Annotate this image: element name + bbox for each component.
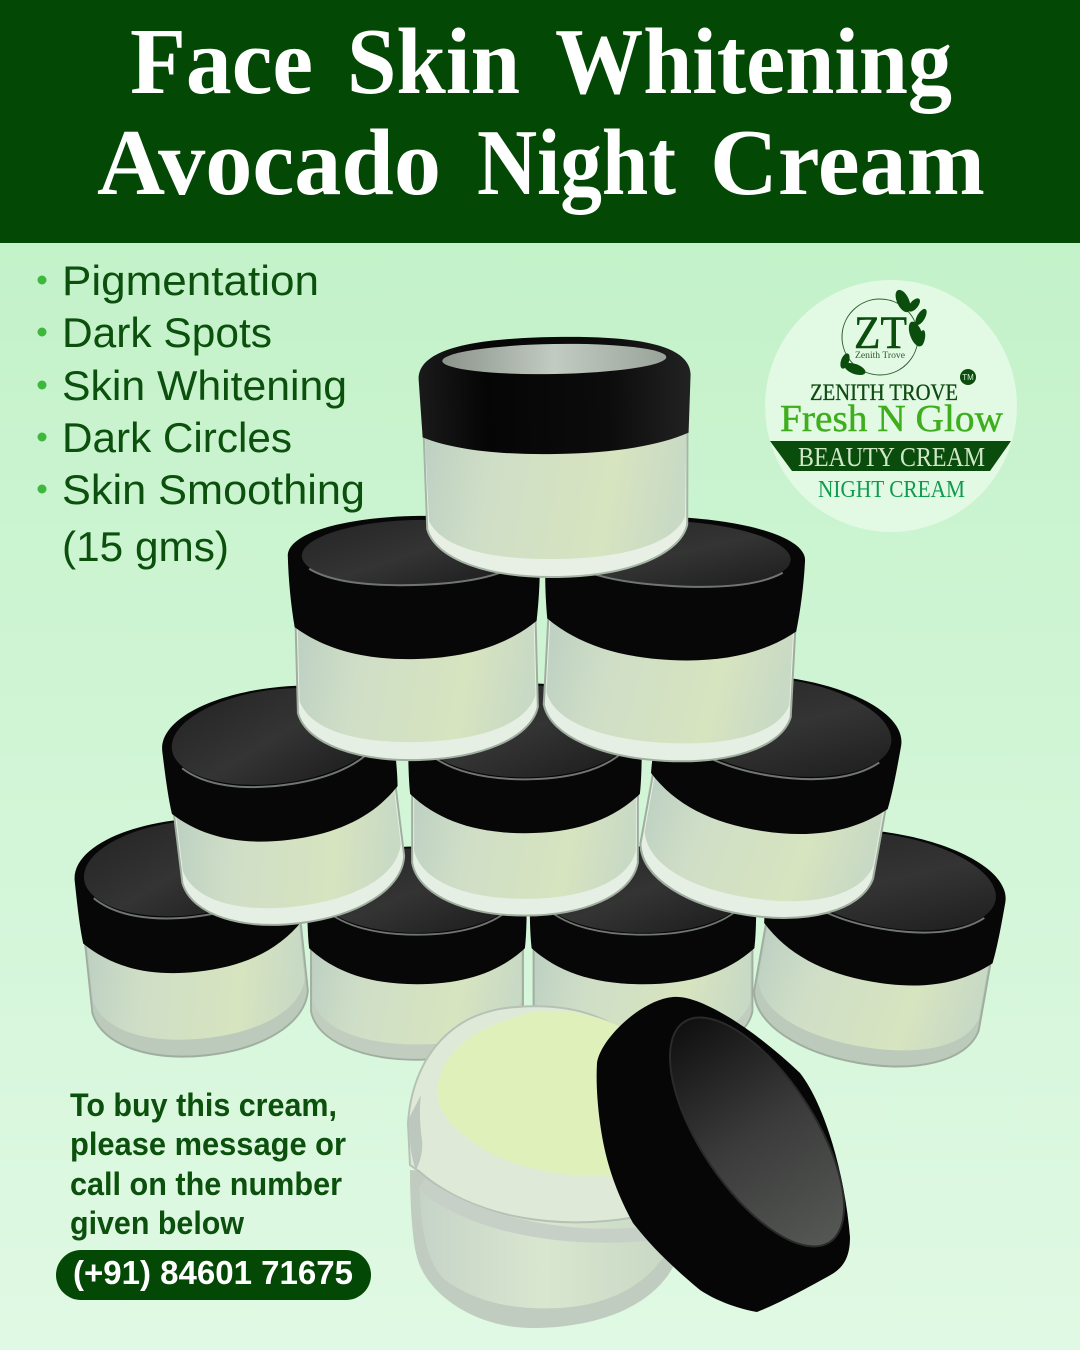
trademark mark: TM — [962, 373, 974, 382]
benefits list: Dark Spots — [62, 309, 272, 356]
cream inside body — [420, 1185, 668, 1308]
open jar with lid — [408, 990, 877, 1328]
cream surface — [437, 1011, 630, 1176]
jar: bottom row left — [69, 808, 317, 1067]
benefits list: Skin Whitening — [62, 362, 347, 409]
logo monogram: Zenith Trove — [855, 350, 905, 360]
jar: third row left — [156, 674, 415, 937]
brand badge: ZENITH TROVE — [810, 380, 958, 405]
logo leaves — [839, 288, 929, 377]
header band — [0, 0, 1080, 243]
neck shadow band — [418, 1178, 655, 1243]
call to action text: please message or — [70, 1126, 346, 1162]
benefits list: Dark Circles — [62, 414, 292, 461]
brand badge — [765, 280, 1017, 532]
open jar lower body — [410, 1170, 675, 1328]
brand badge: Fresh N Glow — [780, 398, 1004, 440]
call to action text: To buy this cream, — [70, 1087, 337, 1123]
benefits list: Pigmentation — [62, 257, 319, 304]
title line 2: Night — [477, 111, 676, 215]
phone number pill — [56, 1250, 371, 1300]
benefits list: Skin Smoothing — [62, 466, 365, 513]
jar: third row centre — [408, 683, 642, 916]
open lid — [597, 990, 877, 1312]
jar: top — [418, 335, 694, 579]
logo monogram: ZT — [854, 307, 907, 359]
title line 2 — [97, 111, 985, 215]
benefits list — [38, 257, 365, 570]
jar: second row left — [287, 513, 545, 763]
brand badge: NIGHT CREAM — [818, 477, 965, 503]
open jar neck — [408, 1006, 665, 1222]
jar: bottom row right — [741, 814, 1014, 1083]
glass edge — [409, 1095, 422, 1170]
logo monogram — [839, 288, 929, 377]
call to action text: call on the number — [70, 1166, 342, 1202]
benefits list: (15 gms) — [62, 523, 229, 570]
title line 1: Skin — [347, 10, 520, 114]
title line 1: Whitening — [555, 10, 952, 114]
title line 1 — [130, 10, 952, 114]
jar: second row right — [535, 510, 807, 768]
phone number pill: (+91) 84601 71675 — [73, 1254, 353, 1291]
jar pyramid — [69, 335, 1014, 1083]
call to action text: given below — [70, 1205, 244, 1241]
trademark mark — [960, 369, 976, 385]
title line 1: Face — [130, 10, 313, 114]
banner: BEAUTY CREAM — [798, 442, 985, 472]
bullet markers — [38, 276, 46, 494]
jar: bottom row centre left — [307, 846, 527, 1060]
title line 2: Cream — [710, 111, 985, 215]
call to action text — [70, 1087, 346, 1241]
jar: third row right — [627, 660, 910, 933]
title line 2: Avocado — [97, 111, 441, 215]
jar: bottom row centre right — [530, 846, 756, 1060]
